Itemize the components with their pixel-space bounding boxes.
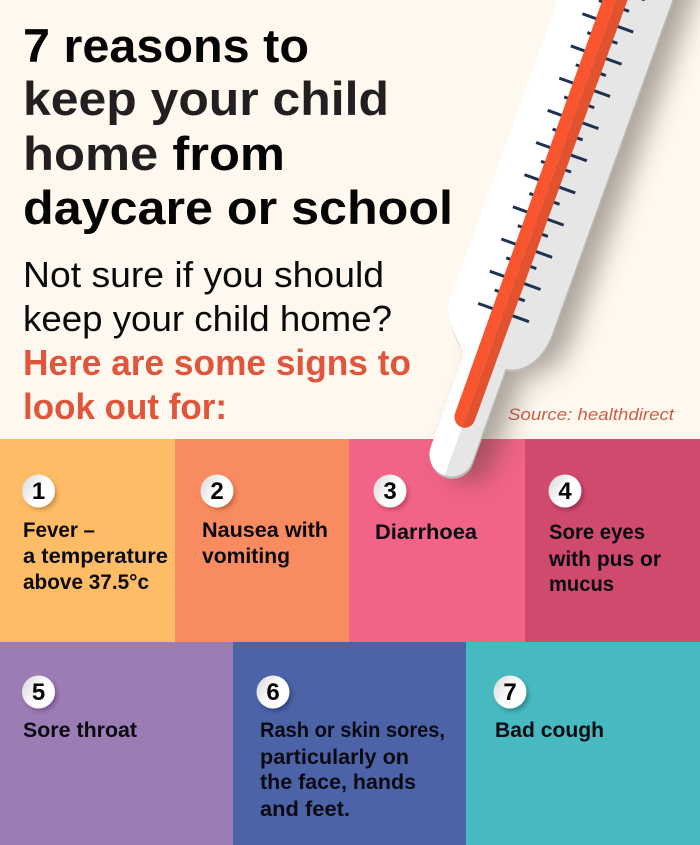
title: keep your child xyxy=(23,72,389,125)
panel 1: fever: a temperature xyxy=(23,545,168,568)
scale ticks xyxy=(478,0,645,322)
panel 7: bad cough: 7 xyxy=(503,679,517,706)
panel 6: rash: Rash or skin sores, xyxy=(260,719,445,742)
panel 3: diarrhoea: Diarrhoea xyxy=(375,521,477,544)
panel 6: rash: particularly on xyxy=(260,746,409,769)
subtitle question: keep your child home? xyxy=(23,298,392,339)
title: home from xyxy=(23,127,285,180)
subtitle question: Not sure if you should xyxy=(23,254,384,295)
source credit: Source: healthdirect xyxy=(508,405,675,424)
title xyxy=(23,19,453,234)
thermometer xyxy=(429,0,700,495)
title: 7 reasons to xyxy=(23,19,309,72)
panel 7: bad cough: Bad cough xyxy=(495,719,604,742)
panel 4: sore eyes: 4 xyxy=(558,478,572,505)
panel 3: diarrhoea xyxy=(349,439,525,642)
panel 2: nausea xyxy=(175,439,349,642)
title: daycare or school xyxy=(23,181,453,234)
panel 5: sore throat: 5 xyxy=(32,679,45,706)
panel 1: fever: Fever – xyxy=(23,519,95,542)
panel 6: rash: 6 xyxy=(266,679,280,706)
panel 5: sore throat xyxy=(0,642,233,845)
panel 4: sore eyes: with pus or xyxy=(548,548,661,571)
subtitle question xyxy=(23,254,392,339)
panel 4: sore eyes: Sore eyes xyxy=(549,521,645,544)
panel 6: rash: and feet. xyxy=(260,798,350,821)
thermometer shadow xyxy=(425,0,700,499)
panel 6: rash xyxy=(233,642,466,845)
subtitle call to action: look out for: xyxy=(23,386,227,427)
panel 2: nausea: 2 xyxy=(210,478,224,505)
panel 4: sore eyes xyxy=(525,439,700,642)
panel 1: fever: 1 xyxy=(32,478,45,505)
panel 1: fever xyxy=(0,439,175,642)
panel 4: sore eyes: mucus xyxy=(549,573,614,596)
mercury column xyxy=(450,0,647,431)
panel 7: bad cough xyxy=(466,642,700,845)
panel 6: rash: the face, hands xyxy=(260,771,416,794)
thermometer body xyxy=(429,0,674,479)
panel 2: nausea: Nausea with xyxy=(202,519,328,542)
subtitle call to action xyxy=(23,342,411,427)
panel 3: diarrhoea: 3 xyxy=(383,478,397,505)
panel 5: sore throat: Sore throat xyxy=(23,719,137,742)
panel 1: fever: above 37.5°c xyxy=(23,571,149,594)
subtitle call to action: Here are some signs to xyxy=(23,342,411,383)
panel 2: nausea: vomiting xyxy=(202,545,290,568)
